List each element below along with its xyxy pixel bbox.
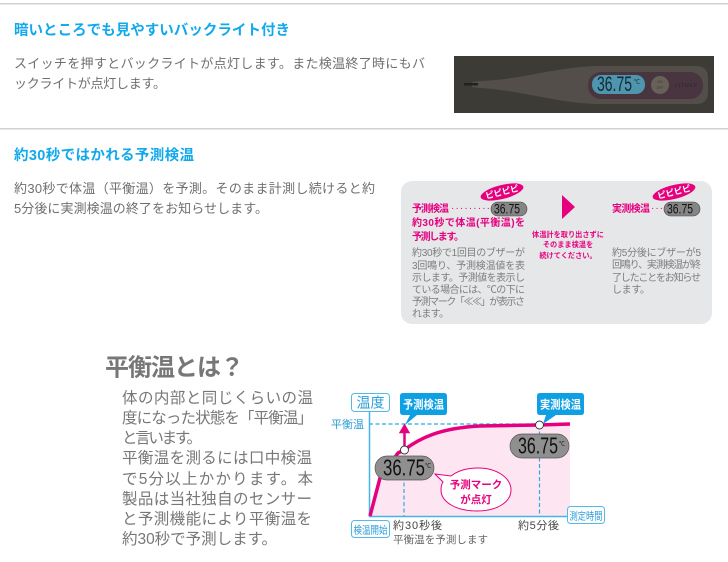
sound badge: left bbox=[479, 180, 525, 204]
y-axis label: 温度 bbox=[356, 394, 384, 410]
photo: thermometer with lit backlight bbox=[454, 56, 714, 113]
label: equilibrium: 平衡温 bbox=[331, 418, 364, 431]
LCD: actual small: 36.75 bbox=[667, 200, 693, 216]
heading: 30-second predictive measurement: 約30秒ではかれる予測検温 bbox=[14, 146, 194, 164]
photo: thermometer with lit backlight: ON bbox=[657, 80, 663, 84]
text block: equilibrium explanation: 製品は当社独自のセンサー bbox=[122, 490, 312, 508]
text block: backlight description bbox=[14, 56, 425, 91]
step: predictive heading: ········· bbox=[451, 203, 490, 214]
step: predictive heading: 約30秒で体温(平衡温)を bbox=[412, 216, 525, 229]
step: actual heading bbox=[612, 202, 663, 215]
text block: keep measuring note: そのまま検温を bbox=[543, 240, 593, 249]
heading: backlight: 暗いところでも見やすいバックライト付き bbox=[14, 22, 290, 39]
text block: actual detail: 約5分後にブザーが5 bbox=[612, 246, 701, 259]
LCD: predictive: ℃ bbox=[425, 463, 431, 470]
tick label: 30 seconds: 約30秒後 bbox=[393, 518, 442, 532]
text block: equilibrium explanation: 体の内部と同じくらいの温 bbox=[122, 389, 313, 407]
text block: predictive description: 5分後に実測検温の終了をお知らせします。 bbox=[14, 201, 268, 216]
step: predictive heading: 予測します。 bbox=[412, 230, 464, 243]
photo: thermometer with lit backlight: OFF bbox=[656, 86, 664, 90]
panel: predictive and actual steps bbox=[401, 180, 712, 324]
LCD: predictive: 36.75 bbox=[383, 454, 425, 480]
step: predictive heading bbox=[412, 202, 525, 243]
temperature curve bbox=[370, 424, 570, 516]
text block: predictive detail: れます。 bbox=[412, 308, 449, 320]
text block: predictive detail bbox=[412, 246, 525, 320]
LCD: predictive small: 36.75 bbox=[494, 200, 520, 216]
text block: predictive detail: 予測マーク「≪≪」が表示さ bbox=[412, 295, 525, 308]
x-axis label: measurement time: 測定時間 bbox=[570, 510, 602, 522]
area under curve bbox=[369, 424, 570, 516]
marker: predictive point bbox=[400, 446, 408, 454]
speech bubble: predictive mark lights up: 予測マーク bbox=[450, 478, 502, 491]
text block: equilibrium explanation: 平衡温を測るには口中検温 bbox=[122, 449, 312, 467]
speech bubble: predictive mark lights up: が点灯 bbox=[460, 493, 492, 506]
text block: predictive detail: 3回鳴り、予測検温値を表 bbox=[412, 259, 525, 272]
photo: thermometer with lit backlight: CITIZEN bbox=[675, 84, 697, 89]
callout: actual bbox=[537, 393, 584, 424]
x-axis label: measurement time bbox=[568, 506, 604, 524]
photo: thermometer with lit backlight: 36.75 bbox=[597, 73, 632, 96]
text block: keep measuring note: 体温計を取り出さずに bbox=[532, 230, 604, 239]
step: actual heading: ··· bbox=[651, 203, 663, 214]
text block: equilibrium explanation: 約30秒で予測します。 bbox=[122, 530, 277, 548]
text block: predictive detail: 示します。予測値を表示し bbox=[412, 271, 525, 284]
text block: actual detail: 了したことをお知らせ bbox=[612, 271, 701, 284]
dashed guides bbox=[369, 424, 540, 516]
step: actual heading: 実測検温 bbox=[612, 202, 650, 215]
step: predictive heading: 予測検温 bbox=[412, 202, 449, 215]
photo: thermometer with lit backlight: ℃ bbox=[634, 79, 640, 86]
text block: equilibrium explanation: で5分以上かかります。本 bbox=[122, 470, 313, 488]
text block: keep measuring note: 続けてください。 bbox=[539, 251, 597, 260]
text block: equilibrium explanation: 度になった状態を「平衡温」 bbox=[122, 409, 313, 427]
callout: predictive: 予測検温 bbox=[403, 398, 444, 412]
x-axis label: start: 検温開始 bbox=[354, 524, 388, 536]
speech bubble: predictive mark lights up bbox=[435, 468, 511, 511]
text block: backlight description: スイッチを押すとバックライトが点灯します。また検温終了時にもバ bbox=[14, 56, 425, 71]
arrow: rising to equilibrium bbox=[401, 426, 408, 449]
LCD: actual: 36.75 bbox=[518, 432, 558, 458]
sound badge: right bbox=[651, 180, 697, 204]
text block: backlight description: ックライトが点灯します。 bbox=[14, 76, 166, 91]
text block: predictive detail: ている場合には、℃の下に bbox=[412, 283, 525, 296]
callout: actual: 実測検温 bbox=[540, 398, 581, 412]
callout: predictive bbox=[400, 393, 447, 425]
text block: predictive description bbox=[14, 181, 375, 216]
tick label: 5 minutes: 約5分後 bbox=[518, 518, 559, 532]
sound badge: right: ピピピピ bbox=[656, 183, 692, 201]
text block: actual detail bbox=[612, 246, 701, 296]
text block: equilibrium explanation bbox=[122, 389, 313, 548]
text block: predictive detail: 約30秒で1回目のブザーが bbox=[412, 246, 525, 259]
note: predicts equilibrium: 平衡温を予測します bbox=[393, 533, 488, 546]
text block: actual detail: 回鳴り、実測検温が終 bbox=[612, 258, 701, 271]
marker: actual point bbox=[536, 421, 544, 429]
sound badge: left: ピピピピ bbox=[484, 183, 520, 201]
arrow: next step bbox=[562, 195, 575, 219]
heading: what is equilibrium temperature: 平衡温とは？ bbox=[105, 354, 244, 382]
text block: equilibrium explanation: と言います。 bbox=[122, 429, 202, 447]
text block: actual detail: します。 bbox=[612, 284, 650, 296]
x-axis label: start bbox=[352, 520, 390, 538]
y-axis label bbox=[352, 394, 390, 412]
axes bbox=[370, 410, 568, 516]
text block: keep measuring note bbox=[532, 230, 604, 260]
text block: equilibrium explanation: と予測機能により平衡温を bbox=[122, 510, 312, 528]
LCD: actual: ℃ bbox=[559, 441, 565, 448]
chart: temperature over time bbox=[331, 393, 604, 546]
text block: predictive description: 約30秒で体温（平衡温）を予測。そのまま計測し続けると約 bbox=[14, 181, 375, 196]
